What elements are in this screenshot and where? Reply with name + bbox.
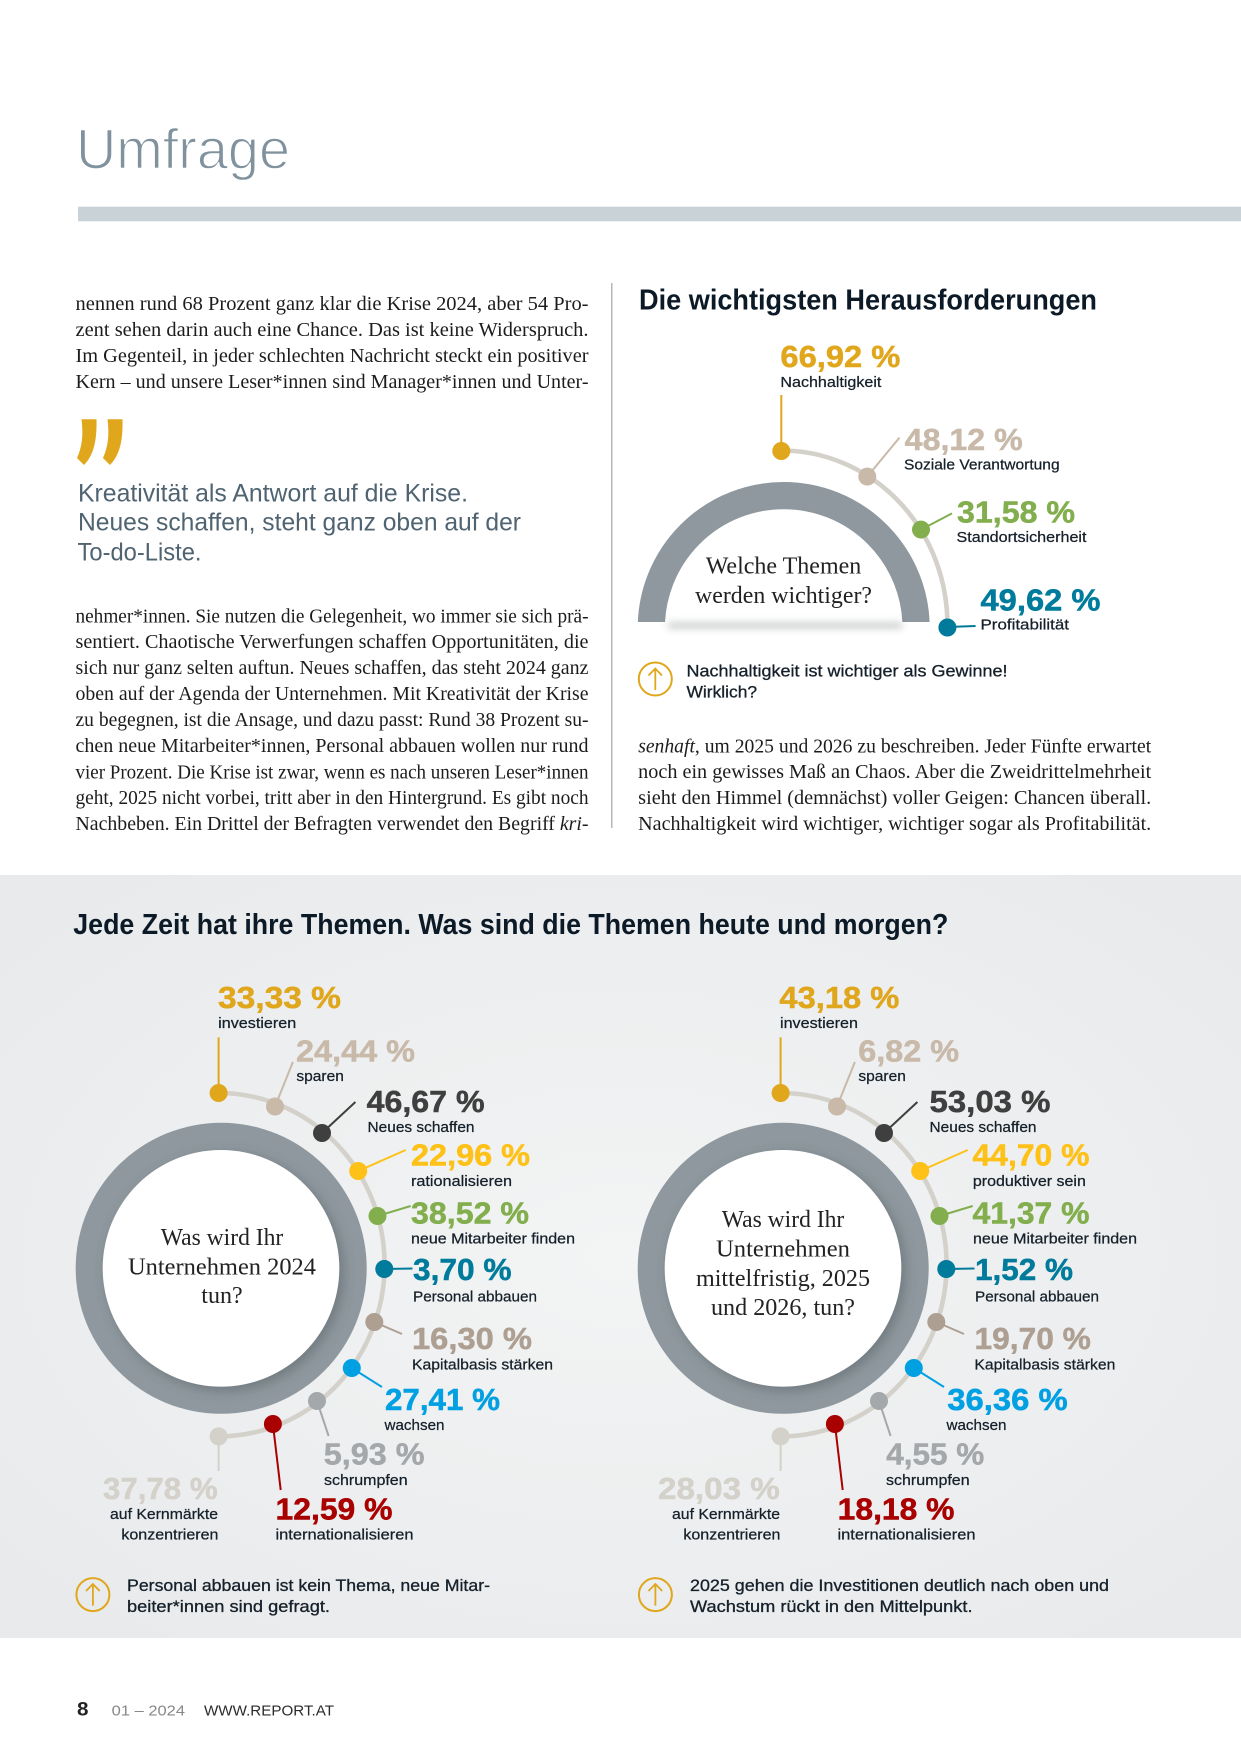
heading: challenges: Die wichtigsten Herausforderungen xyxy=(639,285,1097,317)
item: internationalisieren: internationalisieren xyxy=(276,1526,414,1544)
item: Profitabilität: 49,62 % xyxy=(980,583,1100,618)
item: neue Mitarbeiter finden: 41,37 % xyxy=(972,1196,1090,1230)
item: Kapitalbasis stärken xyxy=(365,1313,553,1374)
item: wachsen xyxy=(905,1359,1068,1434)
panel: themes today and tomorrow xyxy=(0,875,1241,1638)
item: auf Kernmärkte konzentrieren: 37,78 % xyxy=(103,1471,218,1506)
text block: main column: nehmer*innen. Sie nutzen die Gelegenheit, wo immer sie sich prä- xyxy=(76,606,588,628)
text block: intro: nennen rund 68 Prozent ganz klar die Krise 2024, aber 54 Pro- xyxy=(76,293,588,315)
text block: main column: geht, 2025 nicht vorbei, tritt aber in den Hintergrund. Es gibt noch xyxy=(76,787,588,809)
chart: 2024 ring xyxy=(76,980,575,1544)
item: Neues schaffen: Neues schaffen xyxy=(930,1119,1036,1136)
callout: 2024 xyxy=(76,1577,490,1616)
item: Nachhaltigkeit: 66,92 % xyxy=(780,339,900,374)
grey ring xyxy=(76,1123,367,1414)
item: Kapitalbasis stärken: 16,30 % xyxy=(412,1321,532,1356)
item: investieren xyxy=(210,980,341,1102)
pull quote: To-do-Liste. xyxy=(78,539,202,567)
item: schrumpfen xyxy=(308,1392,424,1489)
callout: 2025: Wachstum rückt in den Mittelpunkt. xyxy=(690,1598,972,1616)
item: Profitabilität xyxy=(938,583,1100,636)
item: sparen: 24,44 % xyxy=(296,1033,415,1068)
item: auf Kernmärkte konzentrieren: konzentrieren xyxy=(683,1526,780,1544)
item: neue Mitarbeiter finden: 38,52 % xyxy=(411,1196,529,1230)
item: sparen: sparen xyxy=(858,1068,906,1085)
white disc with question: tun? xyxy=(201,1283,243,1309)
callout: 2024: beiter*innen sind gefragt. xyxy=(127,1598,330,1616)
item: internationalisieren: internationalisieren xyxy=(838,1526,976,1544)
item: Kapitalbasis stärken: Kapitalbasis stärken xyxy=(412,1356,553,1374)
chart: 2025-2026 ring xyxy=(638,980,1137,1544)
text block: intro: Kern – und unsere Leser*innen sind Manager*innen und Unter- xyxy=(76,371,588,393)
callout: challenges xyxy=(639,662,1008,702)
white disc with question: Was wird Ihr xyxy=(161,1225,283,1251)
item: schrumpfen: schrumpfen xyxy=(324,1472,408,1489)
item: schrumpfen xyxy=(870,1392,984,1489)
half ring shadow xyxy=(668,623,902,628)
item: Neues schaffen: 46,67 % xyxy=(367,1084,485,1119)
item: internationalisieren xyxy=(826,1415,976,1544)
pull quote xyxy=(78,480,521,567)
text block: main column: vier Prozent. Die Krise ist zwar, wenn es nach unseren Leser*innen xyxy=(76,762,588,784)
text block: main column: Nachbeben. Ein Drittel der Befragten verwendet den Begriff kri- xyxy=(76,813,588,835)
item: rationalisieren: 22,96 % xyxy=(411,1138,530,1173)
item: investieren xyxy=(772,980,899,1102)
text block: main column: sentiert. Chaotische Verwerfungen schaffen Opportunitäten, die xyxy=(76,631,589,653)
text block: right column xyxy=(638,736,1152,835)
item: investieren: 43,18 % xyxy=(779,980,899,1015)
callout: 2025: 2025 gehen die Investitionen deutlich nach oben und xyxy=(690,1577,1109,1595)
text block: main column xyxy=(76,606,589,835)
item: schrumpfen: 4,55 % xyxy=(886,1436,984,1472)
item: auf Kernmärkte konzentrieren: auf Kernmärkte xyxy=(672,1506,780,1523)
item: neue Mitarbeiter finden xyxy=(368,1196,575,1248)
pull quote: Kreativität als Antwort auf die Krise. xyxy=(78,480,468,508)
footer: WWW.REPORT.AT xyxy=(204,1702,334,1720)
item: Nachhaltigkeit: Nachhaltigkeit xyxy=(780,374,882,391)
item: Personal abbauen: 3,70 % xyxy=(413,1252,512,1287)
text block: main column: sich nur ganz selten auftun. Neues schaffen, das steht 2024 ganz xyxy=(76,657,589,679)
item: Soziale Verantwortung: Soziale Verantwortung xyxy=(904,457,1060,474)
item: auf Kernmärkte konzentrieren xyxy=(103,1427,228,1544)
title bar xyxy=(78,207,1241,221)
panel heading: Jede Zeit hat ihre Themen. Was sind die Themen heute und morgen? xyxy=(73,909,948,941)
item: Personal abbauen: Personal abbauen xyxy=(975,1289,1099,1306)
white disc with question: Unternehmen 2024 xyxy=(128,1254,316,1280)
text block: intro xyxy=(76,293,589,393)
white disc with question: Was wird Ihr xyxy=(722,1207,844,1233)
grey ring xyxy=(638,1123,929,1414)
item: Neues schaffen xyxy=(875,1084,1050,1142)
item: Personal abbauen: 1,52 % xyxy=(975,1252,1073,1287)
footer xyxy=(77,1699,334,1721)
item: Neues schaffen: Neues schaffen xyxy=(368,1119,474,1136)
callout: challenges: Wirklich? xyxy=(686,684,757,702)
item: Soziale Verantwortung xyxy=(858,422,1060,486)
item: Personal abbauen xyxy=(937,1252,1099,1306)
item: auf Kernmärkte konzentrieren xyxy=(658,1427,790,1544)
item: schrumpfen: schrumpfen xyxy=(886,1472,970,1489)
text block: main column: oben auf der Agenda der Unternehmen. Mit Kreativität der Krise xyxy=(76,683,589,705)
item: rationalisieren: rationalisieren xyxy=(411,1173,512,1190)
item: wachsen: 36,36 % xyxy=(947,1382,1068,1417)
item: wachsen: wachsen xyxy=(945,1417,1006,1434)
title: Umfrage xyxy=(76,117,290,181)
item: internationalisieren xyxy=(264,1415,414,1544)
item: wachsen xyxy=(343,1359,500,1434)
white disc with question xyxy=(665,1150,901,1387)
item: investieren: 33,33 % xyxy=(218,980,341,1015)
item: investieren: investieren xyxy=(218,1015,296,1032)
item: Kapitalbasis stärken xyxy=(927,1313,1115,1374)
ring question xyxy=(695,554,872,609)
item: schrumpfen: 5,93 % xyxy=(324,1436,424,1472)
text block: main column: zu begegnen, ist die Ansage, und dazu passt: Rund 38 Prozent su- xyxy=(76,709,588,731)
item: Neues schaffen xyxy=(313,1084,485,1142)
item: neue Mitarbeiter finden: neue Mitarbeiter finden xyxy=(973,1230,1137,1248)
text block: intro: Im Gegenteil, in jeder schlechten Nachricht steckt ein positiver xyxy=(76,345,589,367)
ring question: Welche Themen xyxy=(706,554,861,580)
text block: right column: noch ein gewisses Maß an Chaos. Aber die Zweidrittelmehrheit xyxy=(638,761,1152,783)
item: Kapitalbasis stärken: Kapitalbasis stärken xyxy=(974,1356,1115,1374)
item: Neues schaffen: 53,03 % xyxy=(930,1084,1050,1119)
item: neue Mitarbeiter finden xyxy=(930,1196,1137,1248)
item: Standortsicherheit: 31,58 % xyxy=(957,495,1075,530)
item: Nachhaltigkeit xyxy=(772,339,900,460)
item: Standortsicherheit xyxy=(912,495,1087,546)
item: sparen xyxy=(828,1033,959,1116)
item: rationalisieren xyxy=(349,1138,530,1190)
item: neue Mitarbeiter finden: neue Mitarbeiter finden xyxy=(411,1230,575,1248)
item: Kapitalbasis stärken: 19,70 % xyxy=(974,1321,1091,1356)
item: produktiver sein xyxy=(911,1138,1090,1190)
chart: half ring challenges xyxy=(638,346,1100,636)
white disc with question: und 2026, tun? xyxy=(711,1295,855,1321)
item: internationalisieren: 12,59 % xyxy=(276,1492,392,1527)
callout: challenges: Nachhaltigkeit ist wichtiger als Gewinne! xyxy=(686,662,1008,680)
text block: intro: zent sehen darin auch eine Chance. Das ist keine Widerspruch. xyxy=(76,319,588,341)
item: Personal abbauen: Personal abbauen xyxy=(413,1289,537,1306)
text block: main column: chen neue Mitarbeiter*innen, Personal abbauen wollen nur rund xyxy=(76,735,588,757)
item: wachsen: wachsen xyxy=(383,1417,444,1434)
half ring xyxy=(638,482,930,622)
ring question: werden wichtiger? xyxy=(695,583,872,609)
white disc with question: mittelfristig, 2025 xyxy=(696,1266,870,1292)
text block: right column: senhaft, um 2025 und 2026 zu beschreiben. Jeder Fünfte erwartet xyxy=(638,736,1152,758)
item: auf Kernmärkte konzentrieren: auf Kernmärkte xyxy=(110,1506,218,1523)
item: investieren: investieren xyxy=(780,1015,858,1032)
item: Profitabilität: Profitabilität xyxy=(980,617,1070,634)
item: produktiver sein: produktiver sein xyxy=(973,1173,1086,1190)
item: wachsen: 27,41 % xyxy=(385,1382,500,1417)
item: sparen: 6,82 % xyxy=(858,1033,959,1068)
item: Personal abbauen xyxy=(375,1252,537,1306)
callout: 2025 xyxy=(639,1577,1109,1616)
item: sparen xyxy=(266,1033,415,1116)
item: internationalisieren: 18,18 % xyxy=(838,1492,954,1527)
white disc with question xyxy=(103,1150,339,1387)
footer: 8 xyxy=(77,1699,89,1721)
item: produktiver sein: 44,70 % xyxy=(972,1138,1090,1173)
icon: quotation mark xyxy=(77,419,123,465)
column divider xyxy=(611,283,612,828)
text block: right column: Nachhaltigkeit wird wichtiger, wichtiger sogar als Profitabilität. xyxy=(638,813,1151,835)
item: Standortsicherheit: Standortsicherheit xyxy=(956,529,1087,546)
pull quote: Neues schaffen, steht ganz oben auf der xyxy=(78,509,521,537)
item: auf Kernmärkte konzentrieren: konzentrieren xyxy=(121,1526,218,1544)
item: sparen: sparen xyxy=(296,1068,344,1085)
item: Soziale Verantwortung: 48,12 % xyxy=(905,422,1023,457)
text block: right column: sieht den Himmel (demnächst) voller Geigen: Chancen überall. xyxy=(638,787,1151,809)
callout: 2024: Personal abbauen ist kein Thema, neue Mitar- xyxy=(127,1577,490,1595)
footer: 01 – 2024 xyxy=(112,1702,185,1720)
white disc with question: Unternehmen xyxy=(716,1236,850,1262)
item: auf Kernmärkte konzentrieren: 28,03 % xyxy=(658,1471,780,1506)
